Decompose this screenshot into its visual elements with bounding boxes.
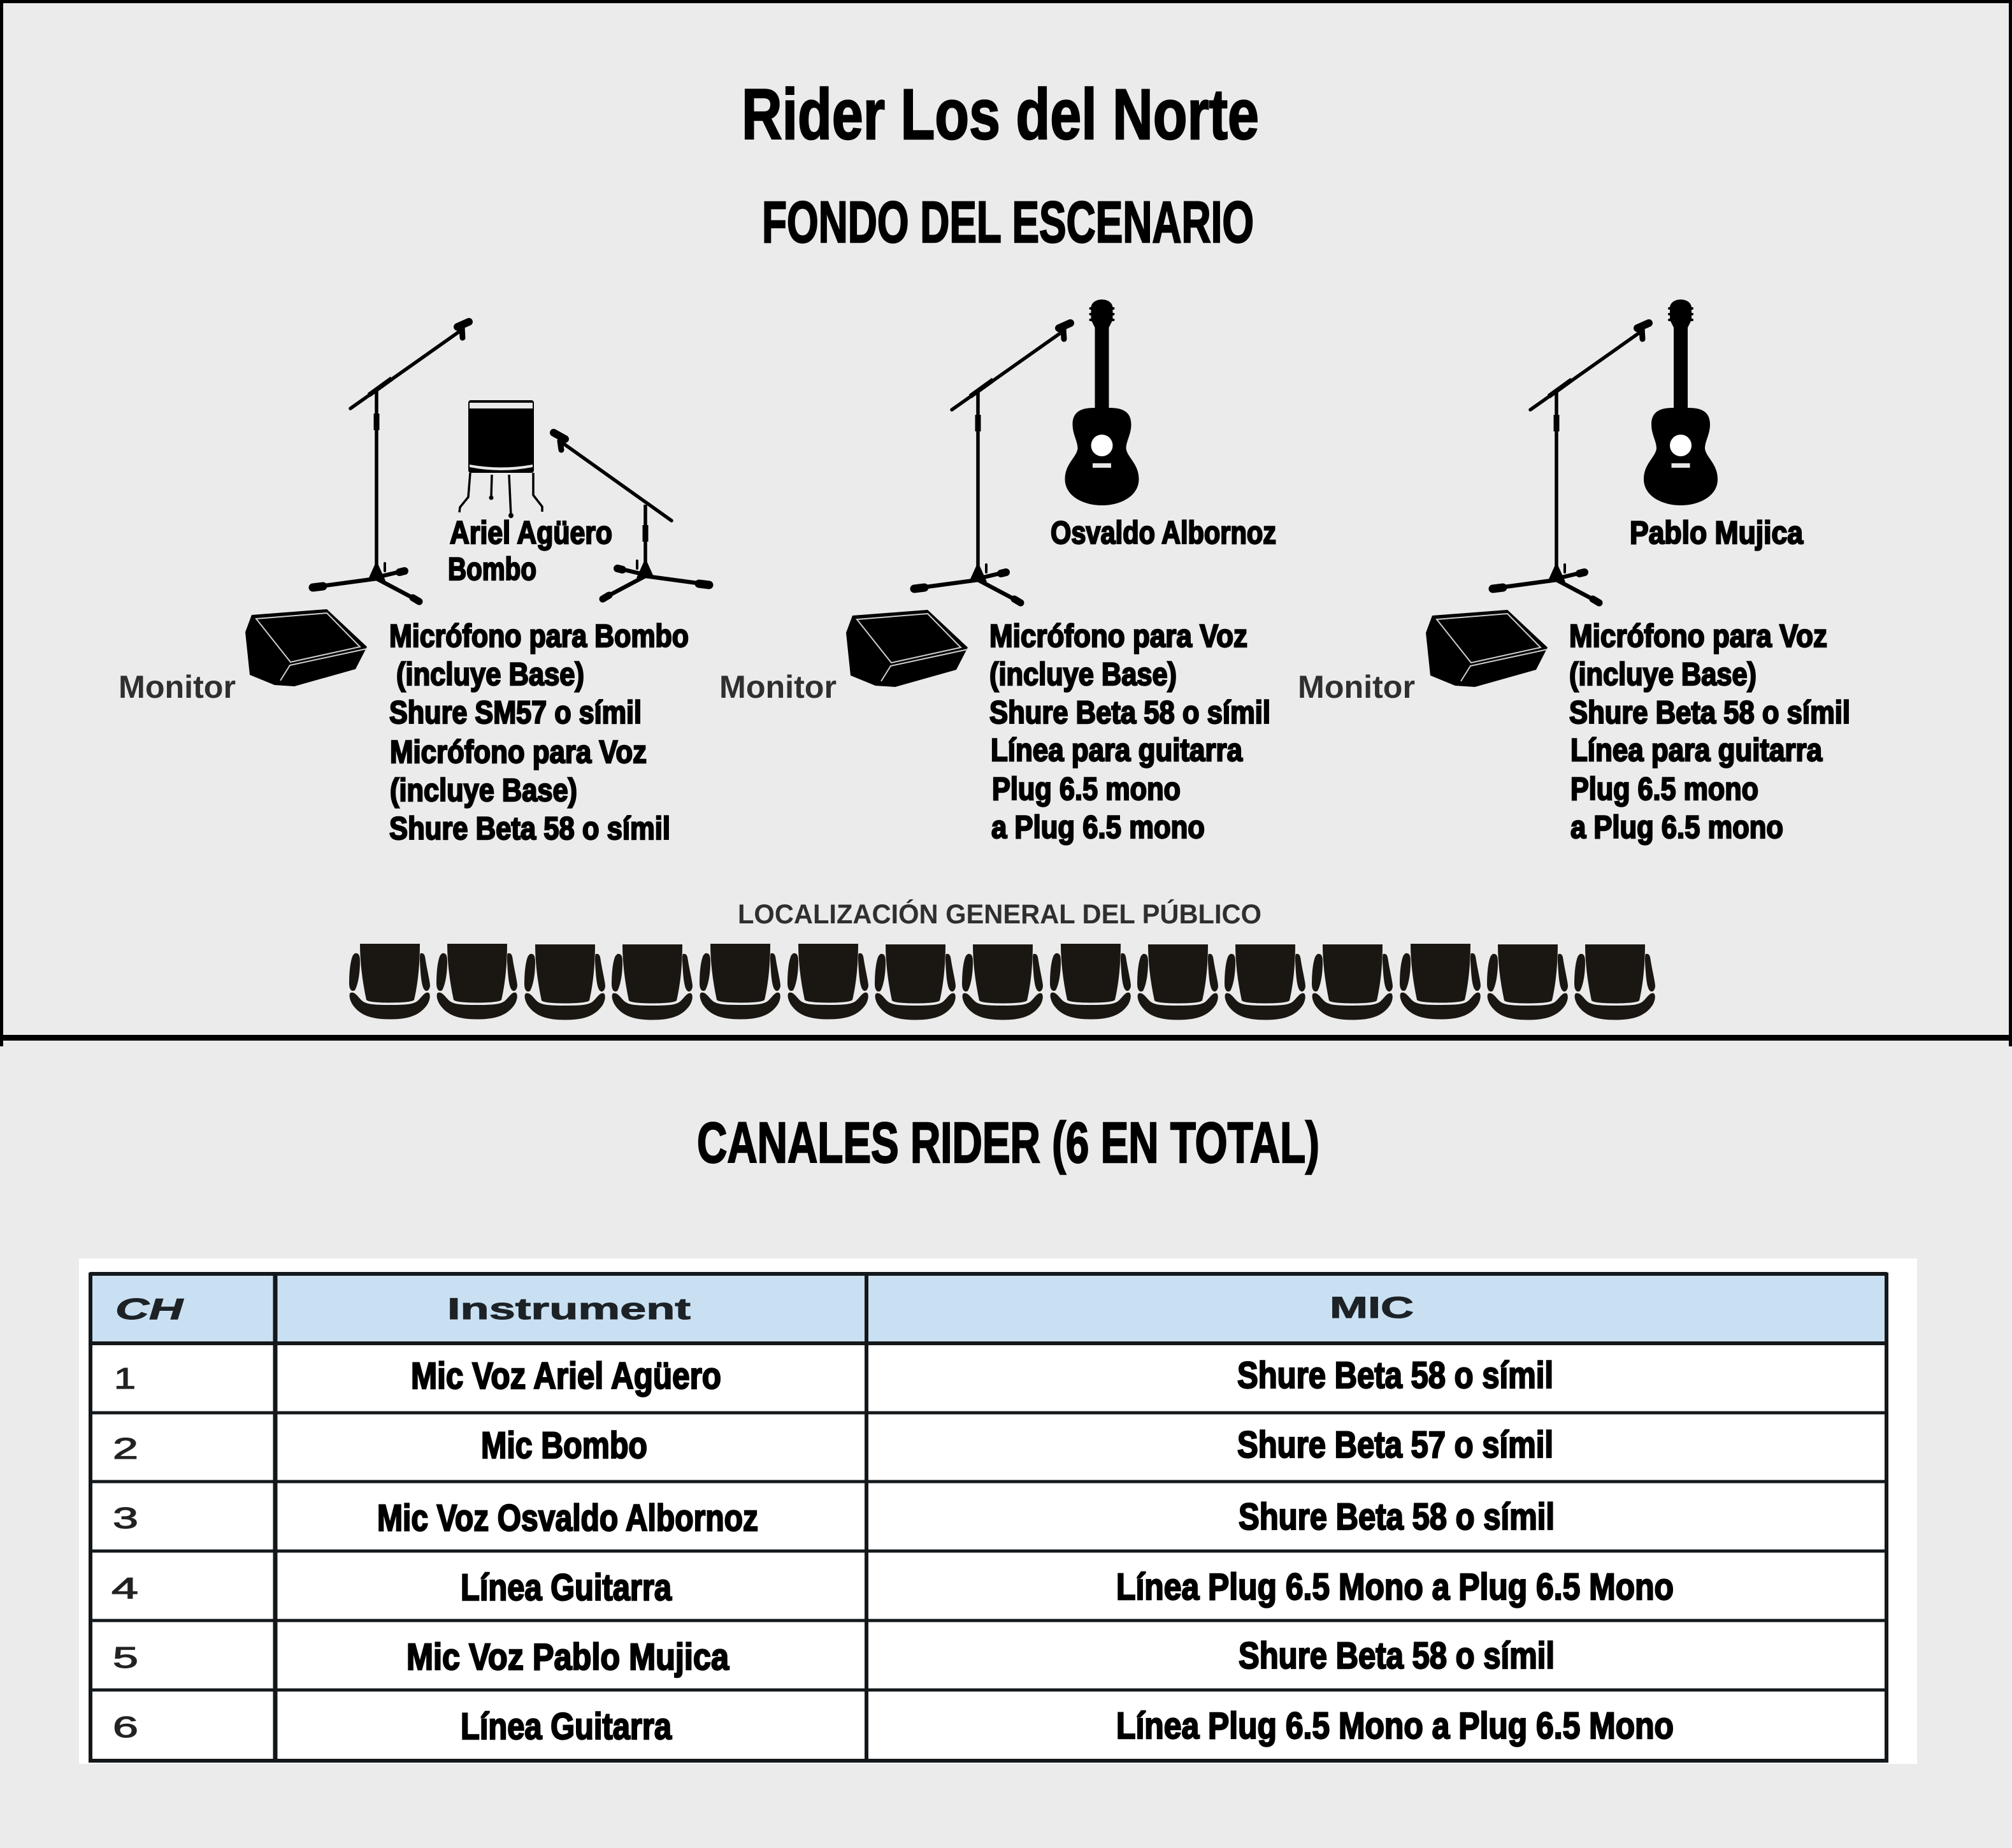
label: Bombo: Bombo [448,551,536,587]
text block: Osvaldo equipment: Shure Beta 58 o símil [989,695,1270,730]
table header labels: CH [115,1292,183,1325]
text block: Pablo equipment [1569,618,1850,845]
table row 6: 6 [113,1710,138,1743]
table row 4: Línea Plug 6.5 Mono a Plug 6.5 Mono [1116,1566,1674,1608]
stage frame [0,0,2012,1046]
text block: Osvaldo equipment: Micrófono para Voz [989,618,1247,654]
icon: mic stand [914,323,1070,603]
table row 3 [113,1496,1555,1539]
heading: canales rider: CANALES RIDER (6 EN TOTAL) [697,1111,1319,1175]
label: monitor: Monitor [1298,669,1415,705]
table row 5: Shure Beta 58 o símil [1239,1635,1555,1677]
text block: Pablo equipment: (incluye Base) [1569,656,1757,692]
table row 2: Mic Bombo [481,1425,647,1466]
table row 3: Shure Beta 58 o símil [1239,1496,1555,1538]
table row 2 [113,1424,1553,1466]
icon: monitor [846,610,968,687]
table row 5: 5 [113,1641,138,1674]
table row 4 [111,1566,1674,1608]
text block: Osvaldo equipment: a Plug 6.5 mono [991,809,1205,845]
table row 1: Shure Beta 58 o símil [1237,1355,1553,1396]
text block: Ariel equipment [389,618,689,846]
label: Ariel Agüero: Ariel Agüero [450,515,612,551]
table header labels [115,1290,1414,1325]
table row 3: Mic Voz Osvaldo Albornoz [377,1498,758,1539]
table row 2: Shure Beta 57 o símil [1237,1424,1553,1466]
table row 6: Línea Guitarra [461,1706,672,1747]
title: Rider Los del Norte [742,75,1259,154]
icon: bass drum bombo [459,400,542,518]
text block: Pablo equipment: a Plug 6.5 mono [1570,809,1783,845]
text block: Pablo equipment: Plug 6.5 mono [1570,771,1758,807]
table row 2: 2 [113,1432,138,1465]
text block: Ariel equipment: Micrófono para Bombo [389,618,689,654]
text block: Ariel equipment: (incluye Base) [396,656,584,692]
table row 1: 1 [114,1362,136,1395]
table row 6 [113,1705,1674,1747]
table row 5: Mic Voz Pablo Mujica [406,1636,729,1678]
icons: audience seats [349,944,1655,1020]
icon: guitar [1644,300,1718,505]
heading: fondo del escenario: FONDO DEL ESCENARIO [762,190,1254,255]
icon: mic stand voice [313,322,469,602]
icon: mic stand bombo [554,433,709,599]
text block: Osvaldo equipment: (incluye Base) [989,656,1177,692]
table header labels: MIC [1330,1290,1414,1324]
table header band [90,1274,1888,1343]
icon: monitor [1426,610,1548,687]
text block: Ariel equipment: Shure SM57 o símil [389,695,642,730]
panel: channel table [79,1259,1917,1764]
table row 3: 3 [113,1501,138,1534]
text block: Pablo equipment: Línea para guitarra [1570,732,1823,768]
icon: monitor [245,609,367,686]
label: monitor: Monitor [719,669,837,705]
text block: Ariel equipment: (incluye Base) [390,772,577,808]
text block: Osvaldo equipment [989,618,1270,845]
panel: Ariel Agüero position [119,322,709,846]
text block: Pablo equipment: Micrófono para Voz [1569,618,1827,654]
table row 4: Línea Guitarra [461,1567,672,1608]
table row 4: 4 [111,1571,138,1605]
icon: guitar [1065,300,1139,505]
table row 1: Mic Voz Ariel Agüero [411,1355,721,1397]
text block: Osvaldo equipment: Plug 6.5 mono [992,771,1181,807]
text block: Ariel equipment: Shure Beta 58 o símil [389,811,670,846]
label: audience location: LOCALIZACIÓN GENERAL DEL PÚBLICO [738,899,1261,930]
icon: mic stand [1493,323,1649,603]
label: monitor: Monitor [119,669,236,705]
panel: Pablo Mujica position [1298,300,1850,845]
table header labels: Instrument [447,1292,691,1325]
table row 5 [113,1635,1555,1678]
text block: Pablo equipment: Shure Beta 58 o símil [1569,695,1850,730]
text block: Osvaldo equipment: Línea para guitarra [991,732,1243,768]
text block: Ariel equipment: Micrófono para Voz [390,734,647,770]
table row 1 [114,1355,1553,1397]
label: Pablo Mujica: Pablo Mujica [1630,515,1804,551]
label: Osvaldo Albornoz: Osvaldo Albornoz [1051,515,1276,551]
table row 6: Línea Plug 6.5 Mono a Plug 6.5 Mono [1116,1705,1674,1747]
panel: Osvaldo Albornoz position [719,300,1276,845]
